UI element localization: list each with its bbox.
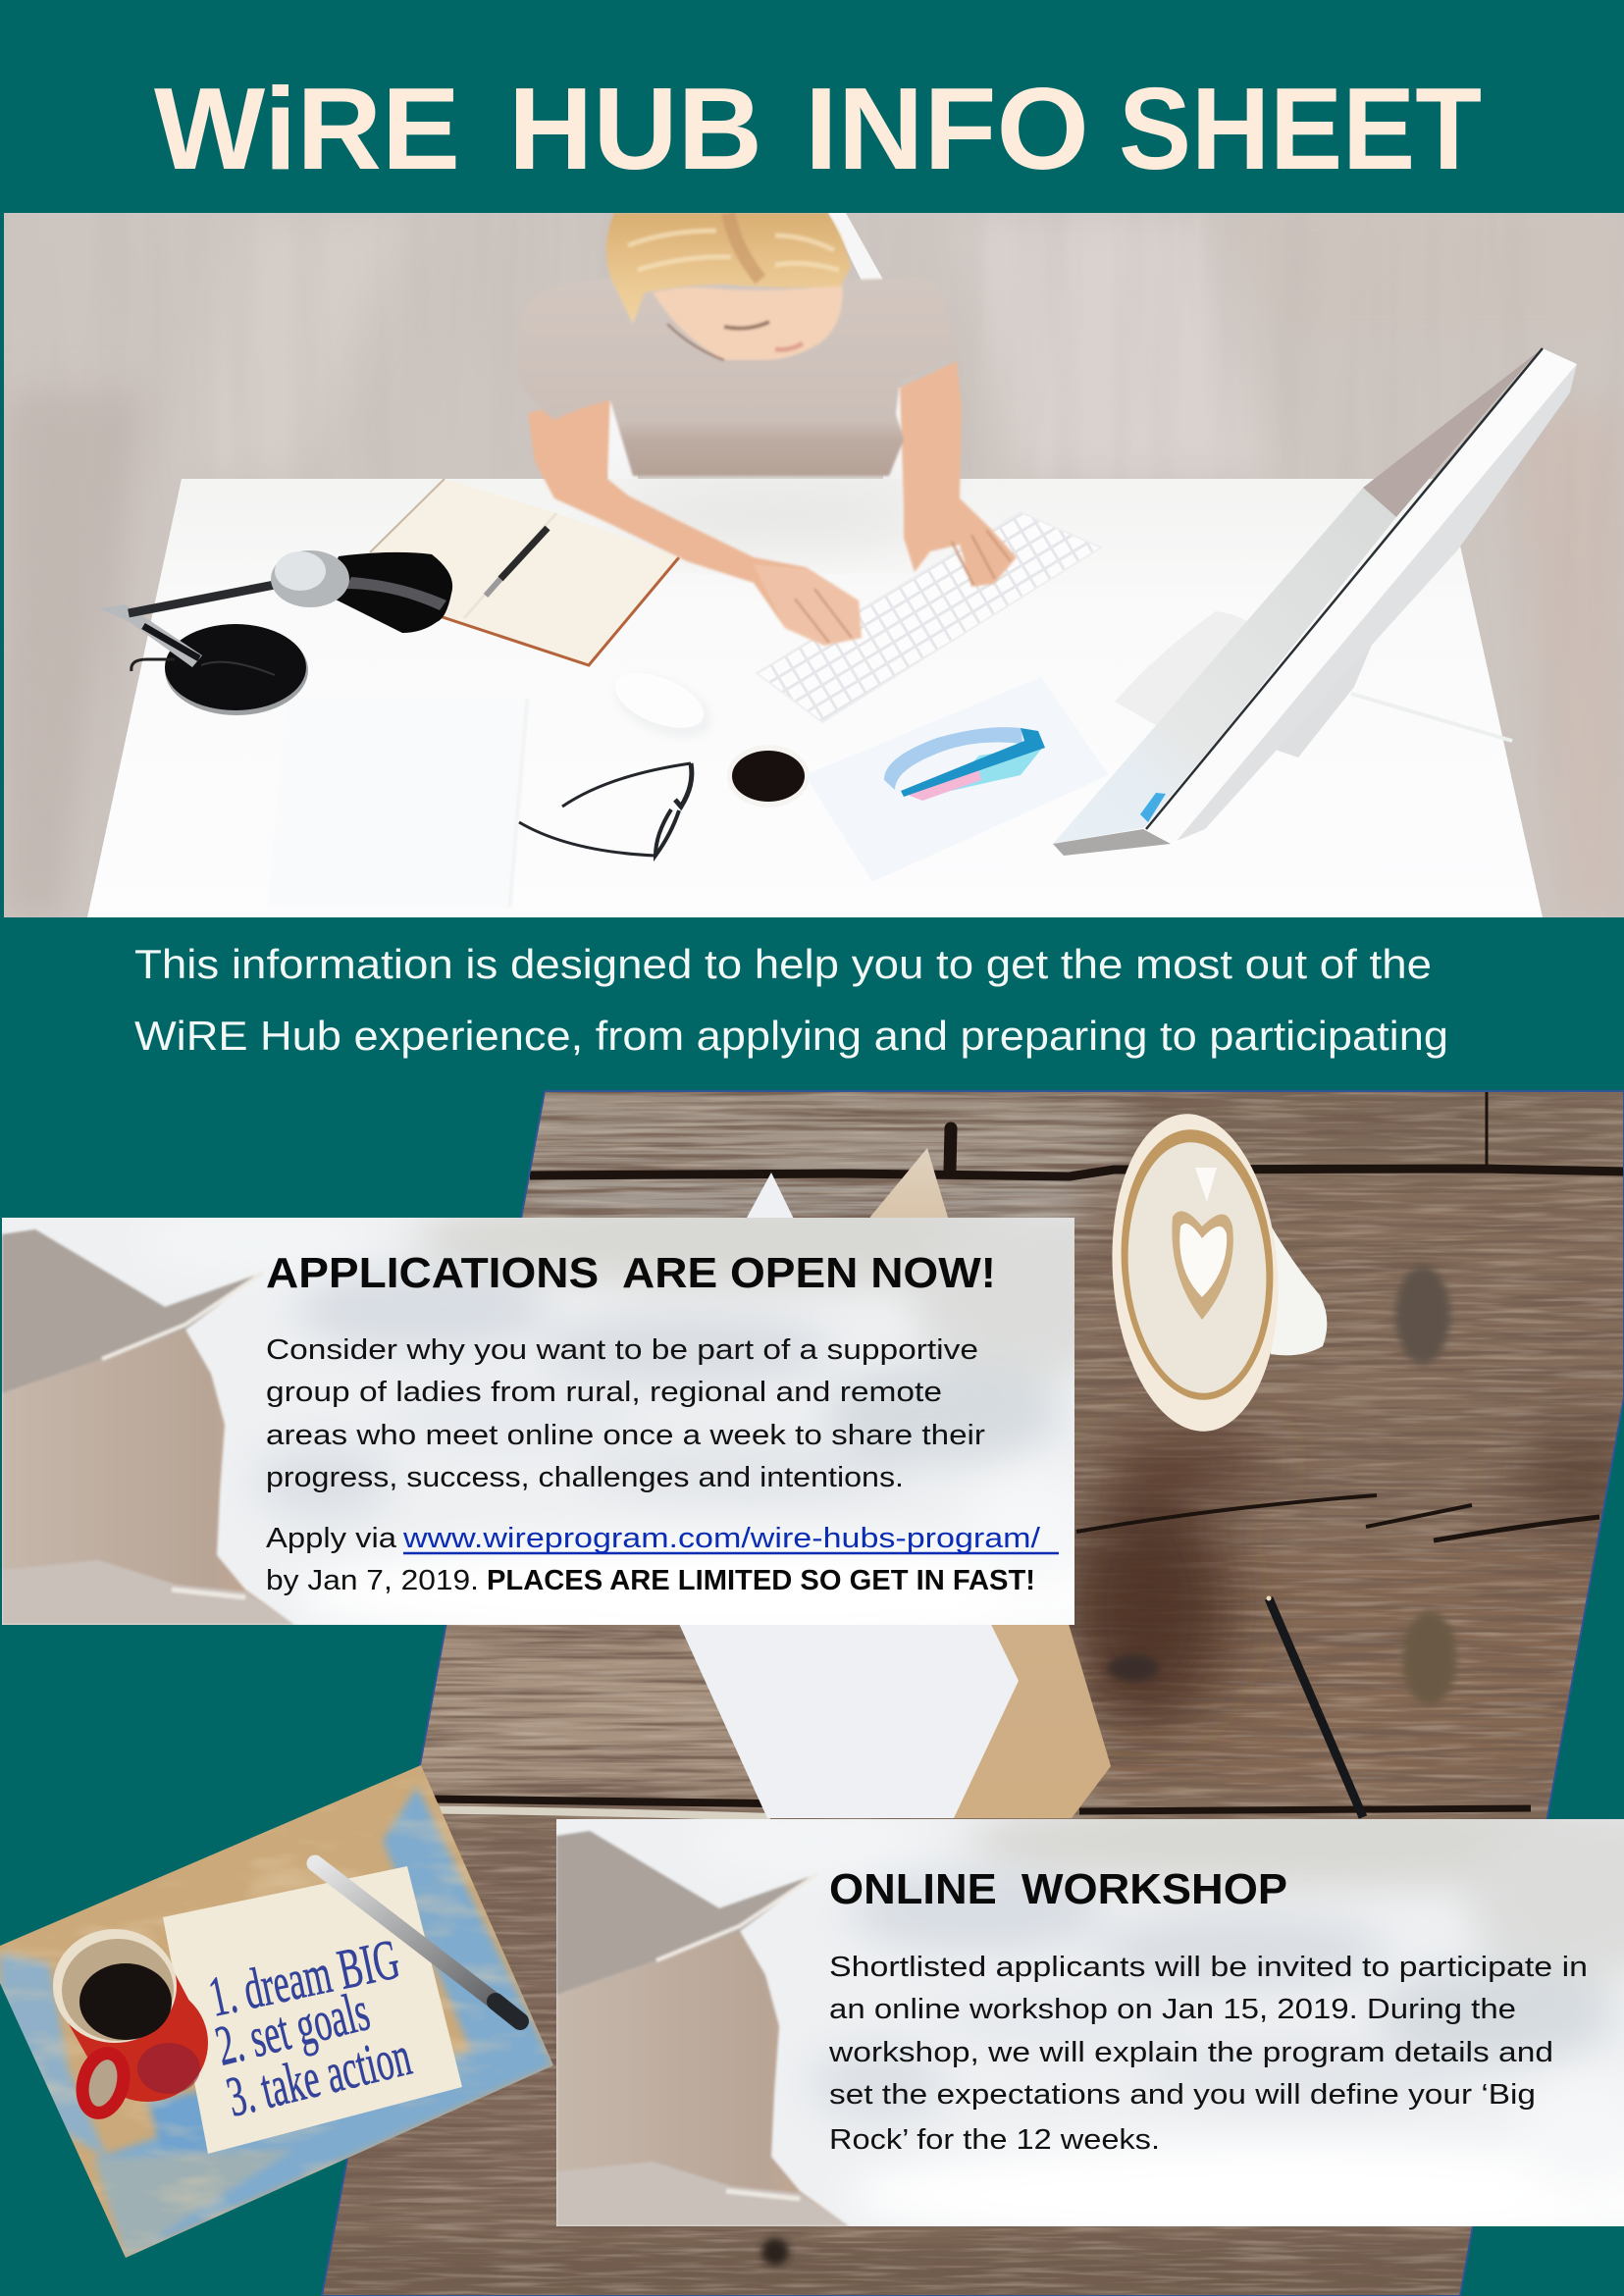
deadline line: PLACES ARE LIMITED SO GET IN FAST! xyxy=(487,1565,1035,1596)
painted wood base xyxy=(0,1756,559,2267)
apply line with link xyxy=(266,1523,1059,1554)
title: INFO xyxy=(805,64,1089,194)
glasses xyxy=(519,763,692,856)
kraft envelope xyxy=(870,1148,1111,1818)
dark stains xyxy=(1065,1433,1624,1727)
pen on notebook xyxy=(486,528,548,596)
silver pen xyxy=(315,1863,520,2021)
latte cup xyxy=(1102,1109,1327,1436)
wooden floor xyxy=(4,213,1624,917)
monitor stand xyxy=(1267,626,1380,757)
card photo background xyxy=(2,1189,1178,1648)
goals text: 2. set goals xyxy=(209,1978,375,2078)
applications body text: progress, success, challenges and intentions. xyxy=(266,1462,904,1493)
card photo background xyxy=(556,1791,1624,2250)
title: WiRE xyxy=(154,64,460,194)
apply line with link: www.wireprogram.com/wire-hubs-program/ xyxy=(402,1523,1041,1554)
white paper xyxy=(608,1173,1019,1818)
title xyxy=(154,64,1482,194)
heading: applications: APPLICATIONS ARE OPEN NOW! xyxy=(266,1249,996,1297)
red mug xyxy=(53,1929,208,2117)
blue tab xyxy=(1140,793,1166,822)
applications body text: Consider why you want to be part of a supportive xyxy=(266,1334,978,1366)
intro text xyxy=(134,941,1448,1059)
deadline line: by Jan 7, 2019. xyxy=(266,1565,479,1596)
intro text: This information is designed to help you to get the most out of the xyxy=(134,941,1432,987)
lips xyxy=(775,343,803,349)
wood grain xyxy=(294,1091,1624,2296)
t-shirt xyxy=(517,278,955,476)
goals text xyxy=(203,1926,417,2129)
applications body text: areas who meet online once a week to share their xyxy=(266,1420,985,1451)
desk shadow near the arms xyxy=(608,486,942,545)
workshop body text: workshop, we will explain the program details and xyxy=(828,2037,1553,2068)
black pen on wood xyxy=(1266,1595,1363,1817)
applications body text xyxy=(266,1334,985,1493)
monitor foot xyxy=(1053,829,1171,856)
neckline xyxy=(667,324,724,360)
monitor rear edge xyxy=(1177,364,1577,841)
workshop body text: set the expectations and you will define your ‘Big xyxy=(829,2079,1536,2111)
workshop body text: an online workshop on Jan 15, 2019. During the xyxy=(829,1994,1516,2025)
title: SHEET xyxy=(1119,64,1482,194)
panel: applications xyxy=(2,1189,1178,1648)
right arm and hand xyxy=(900,361,1017,587)
monitor glass xyxy=(1053,488,1396,844)
planks xyxy=(294,1084,1624,2296)
monitor dark top xyxy=(1363,348,1543,517)
keyboard xyxy=(757,512,1101,722)
workshop body text: Rock’ for the 12 weeks. xyxy=(829,2124,1160,2156)
hero photo: woman working at a white desk xyxy=(4,213,1624,917)
panel: online workshop xyxy=(556,1791,1624,2250)
eye xyxy=(724,322,769,329)
white chair xyxy=(599,213,913,479)
goals text: 3. take action xyxy=(221,2023,417,2129)
monitor reflection on desk xyxy=(1115,611,1261,732)
wood photo: coffee, paper and pen on rustic table xyxy=(294,1084,1624,2296)
white desk xyxy=(87,479,1543,917)
workshop body text: Shortlisted applicants will be invited to participate in xyxy=(829,1952,1588,1983)
monitor xyxy=(1053,348,1577,856)
light plank edge xyxy=(393,1809,770,1817)
wood highlights xyxy=(294,1091,1624,2296)
apply line with link: Apply via xyxy=(266,1523,397,1554)
photo: dream big note with red mug xyxy=(0,1756,559,2267)
open notebook xyxy=(370,479,679,665)
applications body text: group of ladies from rural, regional and remote xyxy=(266,1377,942,1408)
left arm and hand xyxy=(528,392,862,646)
workshop body text xyxy=(828,1952,1588,2156)
neck and face xyxy=(653,285,843,360)
woman xyxy=(517,213,1017,646)
plank gaps and cracks xyxy=(393,1091,1624,1811)
folder on desk xyxy=(508,701,528,907)
wood photo outline xyxy=(322,1091,1624,2296)
coffee cup xyxy=(727,745,810,808)
intro text: WiRE Hub experience, from applying and preparing to participating xyxy=(134,1013,1448,1059)
monitor bezel xyxy=(1143,348,1577,841)
title: HUB xyxy=(508,64,762,194)
printed chart document xyxy=(805,713,1109,881)
monitor cable xyxy=(1351,694,1512,741)
heading: online workshop: ONLINE WORKSHOP xyxy=(829,1865,1287,1913)
knots xyxy=(761,1266,1457,2266)
napkin with handwritten goals xyxy=(163,1866,462,2154)
desk lamp xyxy=(98,550,452,715)
computer mouse xyxy=(623,704,707,734)
goals text: 1. dream BIG xyxy=(203,1926,404,2029)
blonde hair xyxy=(606,213,851,324)
